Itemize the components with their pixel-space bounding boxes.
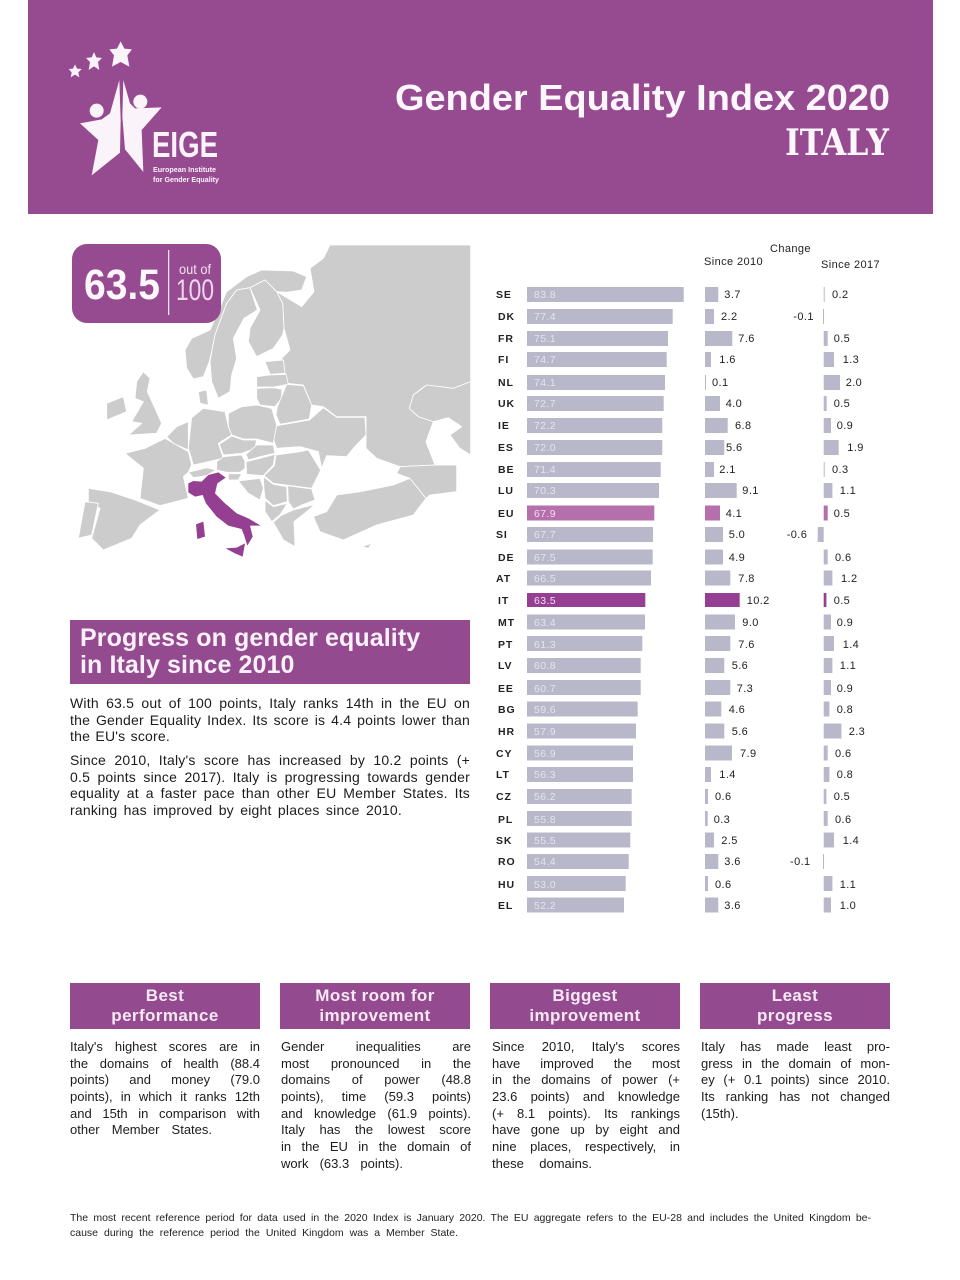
- row: NL: 0.1: [712, 377, 728, 389]
- row: CY: 0.6: [835, 748, 852, 760]
- row: SI: 67.7: [534, 529, 556, 541]
- text: best performance: the domains of health (88.4: [70, 1056, 260, 1071]
- row: FR: [498, 331, 850, 346]
- row: IE: 6.8: [735, 420, 752, 432]
- Italy: [188, 472, 261, 557]
- row: BG: 59.6: [534, 704, 556, 716]
- row: LV: 60.8: [534, 660, 556, 672]
- row: DE: 4.9: [729, 552, 745, 564]
- row: LU: 9.1: [742, 485, 759, 497]
- text: most room for improvement: domains of power (48.8: [281, 1072, 471, 1087]
- text: least progress: Italy has made least pro-: [701, 1039, 890, 1054]
- row: IE: [498, 418, 853, 433]
- row: DK: DK: [498, 311, 515, 323]
- heading: least progress: Least: [772, 986, 818, 1005]
- row: EE: [498, 680, 853, 695]
- row: UK: UK: [498, 398, 515, 410]
- row: RO: RO: [498, 856, 516, 868]
- row: HR: HR: [498, 726, 515, 738]
- row: ES: ES: [498, 442, 514, 454]
- row: FR: 75.1: [534, 333, 556, 345]
- row: FR: FR: [498, 333, 514, 345]
- row: DK: -0.1: [793, 311, 814, 323]
- section heading: progress: Progress on gender equality: [80, 624, 420, 652]
- row: DK: 2.2: [721, 311, 738, 323]
- row: EU: 4.1: [726, 508, 742, 520]
- row: CY: 7.9: [740, 748, 756, 760]
- row: AT: 7.8: [738, 573, 755, 585]
- row: EL: [498, 898, 856, 912]
- row: FI: 1.6: [719, 354, 736, 366]
- row: PT: 61.3: [534, 639, 556, 651]
- row: ES: 72.0: [534, 442, 556, 454]
- row: EE: 0.9: [837, 683, 853, 695]
- footnote: [70, 1212, 871, 1239]
- row: PT: PT: [498, 639, 513, 651]
- row: RO: -0.1: [790, 856, 811, 868]
- row: UK: [498, 396, 850, 411]
- row: MT: [498, 614, 853, 630]
- text: biggest improvement: [492, 1039, 680, 1171]
- row: BG: BG: [498, 704, 516, 716]
- text block: score summary: [70, 695, 470, 744]
- map of Europe with Italy highlighted: [79, 245, 470, 557]
- text: biggest improvement: these domains.: [492, 1156, 592, 1171]
- footnote: cause during the reference period the United Kingdom was a Member State.: [70, 1227, 458, 1239]
- row: BG: 0.8: [837, 704, 853, 716]
- row: MT: MT: [498, 617, 515, 629]
- row: FR: 7.6: [738, 333, 755, 345]
- text: most room for improvement: points), time (59.3 points): [281, 1089, 471, 1104]
- text: biggest improvement: have improved the most: [492, 1056, 680, 1071]
- row: NL: 2.0: [846, 377, 862, 389]
- row: IE: 0.9: [837, 420, 853, 432]
- icon: EIGE logo: European Institute: [153, 167, 216, 174]
- row: LT: 0.8: [837, 769, 853, 781]
- icon: EIGE logo: [69, 41, 219, 184]
- text: best performance: points), in which it ranks 12th: [70, 1089, 260, 1104]
- chart column headings: Since 2017: [821, 259, 880, 271]
- row: HR: 2.3: [849, 726, 865, 738]
- text: most room for improvement: Italy has the lowest score: [281, 1122, 471, 1137]
- score badge: [72, 244, 221, 323]
- row: FI: [498, 352, 859, 367]
- row: SK: [496, 832, 859, 848]
- text block: progress summary: ranking has improved by eight places since 2010.: [70, 802, 402, 818]
- row: DE: [498, 550, 852, 564]
- row: DE: 67.5: [534, 552, 556, 564]
- text: best performance: Italy's highest scores are in: [70, 1039, 260, 1054]
- heading: biggest improvement: Biggest: [552, 986, 618, 1005]
- row: PL: 0.3: [714, 814, 730, 826]
- heading: biggest improvement: improvement: [529, 1006, 641, 1025]
- row: RO: 3.6: [724, 856, 741, 868]
- row: RO: [498, 854, 824, 869]
- row: IT: [498, 593, 850, 607]
- row: ES: [498, 440, 864, 455]
- row: BE: 71.4: [534, 464, 556, 476]
- row: LU: LU: [498, 485, 514, 497]
- row: BE: 2.1: [719, 464, 736, 476]
- row: LT: LT: [496, 769, 510, 781]
- text: least progress: gress in the domain of mon-: [701, 1056, 890, 1071]
- text: biggest improvement: Since 2010, Italy's scores: [492, 1039, 680, 1054]
- heading: best performance: [70, 983, 260, 1029]
- row: CZ: 0.5: [834, 791, 850, 803]
- text: biggest improvement: in the domains of power (+: [492, 1072, 680, 1087]
- row: EL: 1.0: [840, 900, 856, 912]
- text block: progress summary: 0.5 points since 2017). Italy is progressing towards gender: [70, 769, 470, 785]
- row: MT: 9.0: [742, 617, 759, 629]
- row: SI: -0.6: [787, 529, 807, 541]
- row: SE: 0.2: [832, 289, 848, 301]
- row: EE: 7.3: [737, 683, 753, 695]
- text: most room for improvement: Gender inequalities are: [281, 1039, 471, 1054]
- text: best performance: and 15th in comparison with: [70, 1106, 260, 1121]
- text: most room for improvement: most pronounced in the: [281, 1056, 471, 1071]
- text block: progress summary: Since 2010, Italy's score has increased by 10.2 points (+: [70, 752, 470, 768]
- row: SI: 5.0: [729, 529, 745, 541]
- text: best performance: points) and money (79.0: [70, 1072, 260, 1087]
- text block: score summary: With 63.5 out of 100 points, Italy ranks 14th in the EU on: [70, 695, 470, 711]
- row: DE: 0.6: [835, 552, 852, 564]
- row: BG: [498, 702, 853, 716]
- row: FI: FI: [498, 354, 509, 366]
- row: PL: 0.6: [835, 814, 852, 826]
- row: IT: 0.5: [834, 595, 850, 607]
- text: least progress: Its ranking has not changed: [701, 1089, 890, 1104]
- heading: best performance: Best: [146, 986, 184, 1005]
- text: most room for improvement: work (63.3 points).: [281, 1156, 403, 1171]
- row: BE: [498, 462, 848, 477]
- row: SK: 55.5: [534, 835, 556, 847]
- row: RO: 54.4: [534, 856, 556, 868]
- row: LT: 56.3: [534, 769, 556, 781]
- row: PT: [498, 636, 859, 651]
- row: FR: 0.5: [834, 333, 850, 345]
- row: CZ: 56.2: [534, 791, 556, 803]
- row: IT: IT: [498, 595, 509, 607]
- row: CZ: 0.6: [715, 791, 732, 803]
- row: UK: 72.7: [534, 398, 556, 410]
- text: best performance: other Member States.: [70, 1122, 212, 1137]
- heading: biggest improvement: [490, 983, 680, 1029]
- row: IT: 10.2: [747, 595, 770, 607]
- row: CY: CY: [496, 748, 512, 760]
- row: EE: EE: [498, 683, 514, 695]
- text block: progress summary: [70, 752, 470, 818]
- text: least progress: (15th).: [701, 1106, 739, 1121]
- row: SE: 83.8: [534, 289, 556, 301]
- score badge: out of: [179, 261, 211, 277]
- row: PL: PL: [498, 814, 513, 826]
- row: SI: SI: [496, 529, 508, 541]
- text: most room for improvement: [281, 1039, 471, 1171]
- header banner: [28, 0, 933, 214]
- row: EL: 3.6: [724, 900, 741, 912]
- row: EL: EL: [498, 900, 513, 912]
- section heading: progress: [70, 620, 470, 684]
- row: HR: 5.6: [732, 726, 748, 738]
- row: UK: 4.0: [726, 398, 742, 410]
- row: CY: 56.9: [534, 748, 556, 760]
- row: ES: 5.6: [726, 442, 742, 454]
- row: NL: NL: [498, 377, 514, 389]
- row: FI: 74.7: [534, 354, 556, 366]
- country name: ITALY: [785, 122, 890, 164]
- text: least progress: ey (+ 0.1 points) since 2010.: [701, 1072, 890, 1087]
- heading: most room for improvement: Most room for: [315, 986, 435, 1005]
- row: LU: [498, 483, 856, 498]
- row: EU: 0.5: [834, 508, 850, 520]
- row: EU: [498, 506, 850, 520]
- row: PT: 1.4: [843, 639, 859, 651]
- row: NL: [498, 375, 862, 390]
- row: HU: 1.1: [840, 879, 856, 891]
- row: CZ: CZ: [496, 791, 512, 803]
- section heading: progress: in Italy since 2010: [80, 651, 295, 679]
- row: ES: 1.9: [847, 442, 864, 454]
- icon: EIGE logo: for Gender Equality: [153, 177, 219, 184]
- row: HU: 0.6: [715, 879, 732, 891]
- row: DK: [498, 309, 824, 324]
- row: UK: 0.5: [834, 398, 850, 410]
- text: best performance: [70, 1039, 260, 1137]
- row: LV: 1.1: [840, 660, 856, 672]
- row: SK: SK: [496, 835, 512, 847]
- row: SE: SE: [496, 289, 512, 301]
- row: HU: 53.0: [534, 879, 556, 891]
- row: DE: DE: [498, 552, 514, 564]
- row: AT: 1.2: [841, 573, 858, 585]
- text: biggest improvement: have gone up by eight and: [492, 1122, 680, 1137]
- row: IT: 63.5: [534, 595, 556, 607]
- row: HR: [498, 724, 865, 738]
- row: LT: [496, 767, 853, 782]
- row: PL: [498, 811, 852, 826]
- row: EL: 52.2: [534, 900, 556, 912]
- row: EU: EU: [498, 508, 514, 520]
- row: IE: 72.2: [534, 420, 556, 432]
- text block: score summary: the Gender Equality Index. Its score is 4.4 points lower than: [70, 712, 470, 728]
- row: HU: HU: [498, 879, 515, 891]
- row: BE: BE: [498, 464, 514, 476]
- row: HU: [498, 876, 856, 891]
- row: LU: 1.1: [840, 485, 856, 497]
- text: most room for improvement: and knowledge (61.9 points).: [281, 1106, 471, 1121]
- text block: progress summary: equality at a faster pace than other EU Member States. Its: [70, 785, 470, 801]
- text: biggest improvement: nine places, respectively, in: [492, 1139, 680, 1154]
- text: least progress: [701, 1039, 890, 1121]
- text: most room for improvement: in the EU in the domain of: [281, 1139, 471, 1154]
- row: IE: IE: [498, 420, 510, 432]
- footnote: The most recent reference period for data used in the 2020 Index is January 2020. The EU aggregate refers to the EU-28 and includes the United Kingdom be-: [70, 1212, 871, 1224]
- row: LU: 70.3: [534, 485, 556, 497]
- row: PL: 55.8: [534, 814, 556, 826]
- row: EU: 67.9: [534, 508, 556, 520]
- row: NL: 74.1: [534, 377, 556, 389]
- row: CY: [496, 746, 852, 760]
- heading: least progress: [700, 983, 890, 1029]
- row: PT: 7.6: [738, 639, 755, 651]
- row: BE: 0.3: [832, 464, 848, 476]
- title: Gender Equality Index 2020: [395, 77, 890, 118]
- row: SE: [496, 287, 848, 302]
- text block: score summary: the EU's score.: [70, 728, 170, 744]
- row: CZ: [496, 789, 850, 804]
- row: LV: 5.6: [732, 660, 748, 672]
- chart column headings: Change: [770, 243, 811, 255]
- row: EE: 60.7: [534, 683, 556, 695]
- row: MT: 63.4: [534, 617, 556, 629]
- row: FI: 1.3: [843, 354, 859, 366]
- heading: most room for improvement: [280, 983, 470, 1029]
- row: MT: 0.9: [837, 617, 853, 629]
- text: biggest improvement: (+ 8.1 points). Its rankings: [492, 1106, 680, 1121]
- icon: EIGE logo: EIGE: [152, 124, 218, 165]
- heading: least progress: progress: [757, 1006, 833, 1025]
- row: SK: 2.5: [721, 835, 738, 847]
- text: biggest improvement: 23.6 points) and knowledge: [492, 1089, 680, 1104]
- row: AT: 66.5: [534, 573, 556, 585]
- row: LV: [498, 658, 856, 673]
- chart column headings: Since 2010: [704, 256, 763, 268]
- heading: best performance: performance: [111, 1006, 219, 1025]
- score badge: 63.5: [84, 261, 160, 309]
- row: SI: [496, 527, 824, 542]
- chart column headings: [704, 243, 880, 271]
- row: LV: LV: [498, 660, 512, 672]
- heading: most room for improvement: improvement: [319, 1006, 431, 1025]
- row: HR: 57.9: [534, 726, 556, 738]
- row: AT: AT: [496, 573, 511, 585]
- row: BG: 4.6: [729, 704, 745, 716]
- row: SK: 1.4: [843, 835, 859, 847]
- row: AT: [496, 570, 858, 586]
- row: DK: 77.4: [534, 311, 556, 323]
- row: LT: 1.4: [719, 769, 736, 781]
- bar chart: index scores and change by country: [496, 243, 880, 912]
- row: SE: 3.7: [724, 289, 741, 301]
